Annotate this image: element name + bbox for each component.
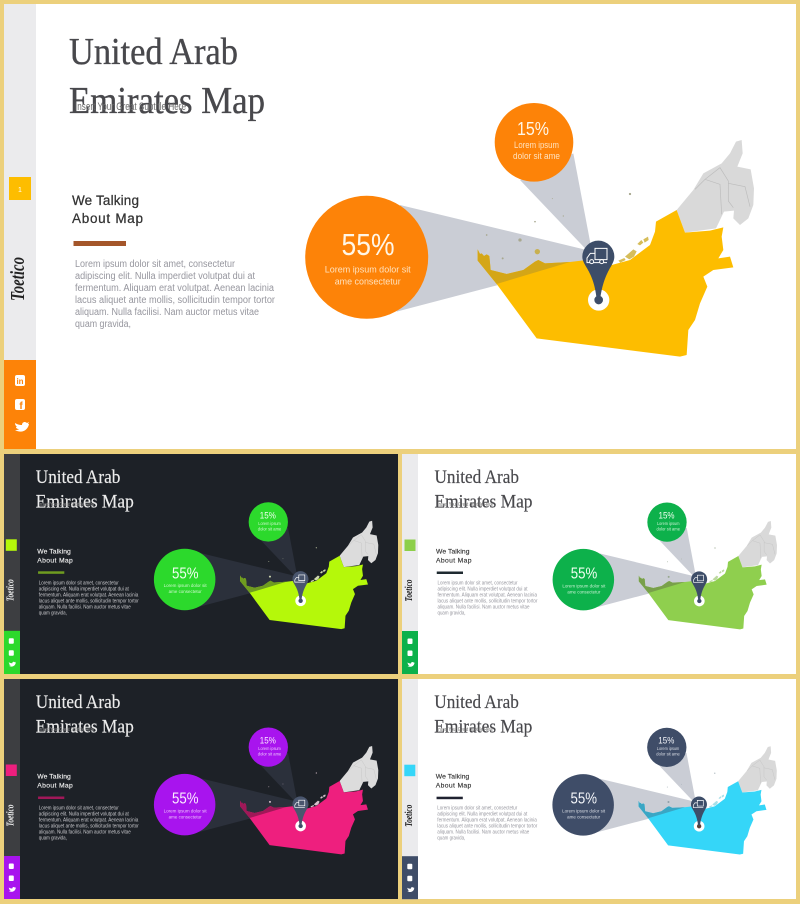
callout: 55 percent: 55% — [342, 227, 394, 262]
text block: quam gravida, — [437, 836, 465, 842]
text block: adipiscing elit. Nulla imperdiet volutpat dui at — [39, 812, 129, 818]
map chart — [154, 728, 378, 854]
callout: 15 percent: dolor sit ame — [258, 752, 282, 756]
callout: 55 percent: Lorem ipsum dolor sit — [562, 583, 606, 589]
callout: 55 percent — [154, 774, 215, 835]
callout: 55 percent: 55% — [571, 791, 597, 808]
text block: Lorem ipsum dolor sit amet, consectetur — [39, 580, 119, 586]
title: Emirates Map — [434, 492, 532, 512]
callout: 15 percent: dolor sit ame — [656, 526, 680, 532]
text block: About Map — [436, 558, 472, 564]
title: Insert Your Great Subtitle Here — [39, 727, 94, 733]
callout: 55 percent: 55% — [571, 566, 597, 582]
callout: 55 percent: ame consectetur — [169, 589, 202, 595]
title: United Arab — [434, 692, 519, 713]
callout: 15 percent: 15% — [658, 736, 674, 746]
text block: adipiscing elit. Nulla imperdiet volutpat dui at — [39, 586, 129, 592]
title: Insert Your Great Subtitle Here — [75, 101, 186, 113]
title: Emirates Map — [36, 491, 134, 512]
text block: lacus aliquet ante mollis, sollicitudin tempor tortor — [75, 295, 276, 306]
panel: green dark slide — [4, 454, 398, 674]
text block: We Talking — [37, 548, 71, 555]
callout: 15 percent: dolor sit ame — [258, 526, 282, 531]
text block: quam gravida, — [438, 610, 466, 616]
text block: adipiscing elit. Nulla imperdiet volutpat dui at — [437, 812, 528, 818]
title: United Arab — [36, 467, 120, 488]
title — [36, 692, 134, 738]
text block: aliquam. Nulla facilisi. Nam auctor metus vitae — [438, 604, 530, 610]
text block: aliquam. Nulla facilisi. Nam auctor metus vitae — [39, 830, 131, 836]
callout: 55 percent: Lorem ipsum dolor sit — [325, 265, 411, 276]
callout: 55 percent: ame consectetur — [169, 814, 202, 820]
text block — [37, 548, 139, 616]
title: Insert Your Great Subtitle Here — [438, 502, 493, 508]
callout: 15 percent: 15% — [260, 736, 276, 746]
text block: About Map — [37, 782, 73, 790]
sidebar — [4, 4, 36, 449]
sidebar: in — [16, 377, 24, 386]
text block: lacus aliquet ante mollis, sollicitudin tempor tortor — [438, 598, 538, 604]
text block: Lorem ipsum dolor sit amet, consectetur — [437, 806, 518, 812]
callout: 15 percent: 15% — [517, 118, 549, 139]
sidebar: Toetico — [5, 579, 16, 601]
title — [434, 692, 532, 738]
callout: 15 percent: dolor sit ame — [656, 752, 680, 757]
text block: We Talking — [72, 193, 139, 208]
callout: 15 percent — [495, 103, 573, 182]
panel: purple dark slide — [4, 679, 398, 899]
callout: 55 percent: 55% — [172, 790, 199, 808]
text block: Lorem ipsum dolor sit amet, consectetur — [438, 580, 518, 586]
icon: location pin — [292, 796, 308, 831]
callout: 55 percent — [553, 549, 614, 610]
sidebar: Toetico — [404, 580, 415, 602]
title: Emirates Map — [36, 716, 134, 738]
text block: quam gravida, — [39, 610, 67, 616]
sidebar — [4, 679, 20, 899]
callout: 15 percent — [647, 502, 687, 542]
callout: 15 percent — [249, 728, 288, 767]
title — [434, 467, 532, 512]
icon: location pin — [582, 241, 614, 311]
text block: quam gravida, — [75, 319, 131, 330]
title: Emirates Map — [69, 80, 265, 122]
sidebar: f — [19, 401, 23, 412]
title: Emirates Map — [434, 717, 532, 738]
text block — [37, 774, 139, 842]
text block: fermentum. Aliquam erat volutpat. Aenean lacinia — [39, 818, 138, 824]
callout: 55 percent: ame consectetur — [335, 276, 401, 288]
text block: Lorem ipsum dolor sit amet, consectetur — [75, 259, 236, 270]
title: Insert Your Great Subtitle Here — [39, 502, 94, 508]
callout: 15 percent — [249, 502, 288, 542]
callout: 55 percent — [305, 196, 428, 319]
sidebar: Toetico — [5, 804, 16, 826]
callout: 55 percent: ame consectetur — [567, 589, 601, 595]
map chart — [154, 502, 378, 629]
sidebar — [402, 454, 418, 674]
text block: fermentum. Aliquam erat volutpat. Aenean lacinia — [75, 283, 274, 294]
text block: fermentum. Aliquam erat volutpat. Aenean lacinia — [437, 818, 537, 824]
callout: 15 percent: 15% — [260, 510, 276, 520]
text block: Lorem ipsum dolor sit amet, consectetur — [39, 806, 119, 812]
text block — [436, 774, 538, 842]
icon: location pin — [691, 797, 707, 832]
callout: 15 percent: Lorem ipsum — [514, 140, 559, 150]
sidebar: 1 — [18, 187, 22, 194]
callout: 55 percent: Lorem ipsum dolor sit — [164, 583, 207, 589]
panel: green white slide — [402, 454, 796, 674]
callout: 15 percent: dolor sit ame — [513, 151, 560, 161]
panel: blue white slide — [402, 679, 796, 899]
text block: quam gravida, — [39, 836, 67, 842]
sidebar: Toetico — [404, 805, 415, 827]
text block: adipiscing elit. Nulla imperdiet volutpat dui at — [75, 271, 255, 282]
callout: 15 percent: Lorem ipsum — [258, 746, 281, 751]
callout: 15 percent: 15% — [658, 510, 674, 520]
text block: We Talking — [436, 774, 470, 781]
callout: 15 percent: Lorem ipsum — [657, 746, 680, 751]
title: United Arab — [36, 692, 120, 713]
callout: 15 percent — [647, 728, 686, 767]
callout: 55 percent: ame consectetur — [567, 814, 601, 820]
text block: fermentum. Aliquam erat volutpat. Aenean lacinia — [438, 592, 537, 598]
map chart — [553, 502, 777, 629]
title — [69, 31, 265, 122]
text block: About Map — [436, 783, 472, 790]
callout: 15 percent: Lorem ipsum — [258, 521, 281, 526]
callout: 55 percent: Lorem ipsum dolor sit — [164, 808, 207, 814]
text block: aliquam. Nulla facilisi. Nam auctor metus vitae — [437, 830, 529, 836]
callout: 55 percent — [154, 549, 215, 610]
panel: large orange white slide — [4, 4, 796, 449]
text block — [72, 193, 276, 330]
map chart — [305, 103, 754, 357]
sidebar — [4, 454, 20, 674]
text block: aliquam. Nulla facilisi. Nam auctor metus vitae — [39, 604, 131, 610]
icon: location pin — [292, 571, 308, 606]
callout: 55 percent: Lorem ipsum dolor sit — [562, 809, 606, 815]
text block: lacus aliquet ante mollis, sollicitudin tempor tortor — [437, 824, 538, 830]
text block: aliquam. Nulla facilisi. Nam auctor metus vitae — [75, 307, 259, 318]
text block: lacus aliquet ante mollis, sollicitudin tempor tortor — [39, 824, 139, 830]
callout: 55 percent: 55% — [172, 565, 199, 582]
title: Insert Your Great Subtitle Here — [437, 727, 493, 733]
title: United Arab — [434, 467, 519, 488]
icon: location pin — [691, 571, 707, 606]
title — [36, 467, 134, 512]
title: United Arab — [69, 31, 238, 73]
text block: About Map — [72, 211, 143, 226]
text block: lacus aliquet ante mollis, sollicitudin tempor tortor — [39, 598, 139, 604]
text block — [436, 548, 538, 616]
text block: We Talking — [37, 774, 71, 780]
map chart — [552, 728, 777, 855]
text block: adipiscing elit. Nulla imperdiet volutpat dui at — [438, 586, 528, 592]
text block: fermentum. Aliquam erat volutpat. Aenean lacinia — [39, 592, 138, 598]
sidebar — [402, 679, 418, 899]
callout: 55 percent — [552, 774, 614, 836]
text block: We Talking — [436, 548, 470, 556]
text block: About Map — [37, 557, 73, 564]
sidebar: Toetico — [7, 257, 29, 301]
callout: 15 percent: Lorem ipsum — [657, 521, 680, 526]
